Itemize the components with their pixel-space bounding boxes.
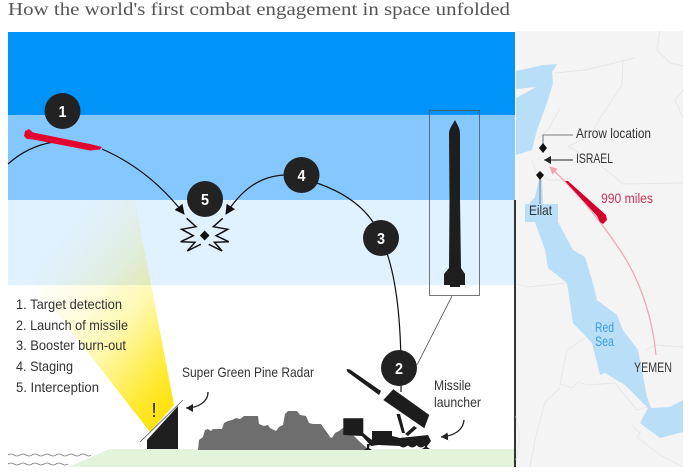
Arrow location marker: Arrow location — [576, 125, 651, 141]
launcher label arrow — [441, 420, 464, 437]
divider — [514, 200, 516, 467]
steps list: 3. Booster burn-out — [16, 337, 126, 353]
radar label arrow — [186, 392, 208, 408]
missile flight path — [550, 167, 656, 355]
target missile — [24, 129, 102, 150]
Eilat marker — [529, 171, 552, 218]
stabilisers — [364, 444, 372, 450]
step marker 5 — [187, 181, 223, 217]
sky band: middle — [8, 115, 515, 200]
missile launcher — [343, 369, 431, 450]
Red Sea label — [595, 319, 614, 349]
step marker 2: 2 — [395, 361, 403, 378]
city skyline — [198, 411, 367, 450]
Red Sea label: Red — [595, 319, 614, 335]
step marker 1: 1 — [58, 104, 67, 121]
launched missile — [347, 369, 381, 395]
launcher label: Missile — [434, 377, 471, 393]
step marker 5: 5 — [201, 192, 209, 209]
launcher label: launcher — [434, 394, 481, 410]
interceptor trajectory — [226, 175, 401, 392]
Eilat marker: Eilat — [529, 202, 552, 218]
step marker 3: 3 — [377, 231, 385, 248]
steps list: 4. Staging — [16, 358, 73, 374]
step marker 2 — [381, 350, 417, 386]
wheels — [398, 438, 408, 448]
steps list — [16, 296, 128, 395]
step marker 4: 4 — [298, 168, 306, 185]
missile silhouette — [444, 120, 465, 287]
interception burst — [181, 218, 229, 251]
panel: atmosphere diagram — [8, 32, 515, 467]
ballistic missile trajectory — [8, 142, 184, 214]
steps list: 5. Interception — [16, 379, 99, 395]
step marker 3 — [363, 220, 399, 256]
launcher label — [434, 377, 481, 410]
ground — [68, 449, 515, 467]
panel: map — [516, 31, 683, 467]
Red Sea label: Sea — [595, 333, 614, 349]
steps list: 2. Launch of missile — [16, 317, 128, 333]
water waves — [8, 454, 91, 465]
radar beam — [8, 200, 174, 432]
Israel label — [544, 150, 613, 166]
Mediterranean Sea — [516, 64, 557, 155]
distance label: 990 miles — [601, 190, 653, 206]
steps list: 1. Target detection — [16, 296, 122, 312]
Israel label: ISRAEL — [576, 150, 613, 166]
land — [516, 31, 683, 467]
sky band: upper — [8, 32, 515, 115]
sky band: lower — [8, 200, 515, 285]
radar label: Super Green Pine Radar — [182, 364, 314, 380]
red missile on map — [565, 181, 607, 224]
Red Sea — [525, 180, 683, 438]
radar — [140, 400, 183, 449]
radar: ! — [151, 400, 157, 422]
launcher supports — [396, 414, 405, 433]
Yemen label: YEMEN — [634, 359, 672, 375]
country borders — [516, 31, 683, 467]
missile detail box — [417, 110, 480, 365]
step marker 1 — [44, 93, 80, 129]
step marker 4 — [284, 157, 320, 193]
Arrow location marker — [539, 125, 651, 153]
generator unit — [343, 418, 431, 446]
launcher canister — [383, 389, 429, 428]
